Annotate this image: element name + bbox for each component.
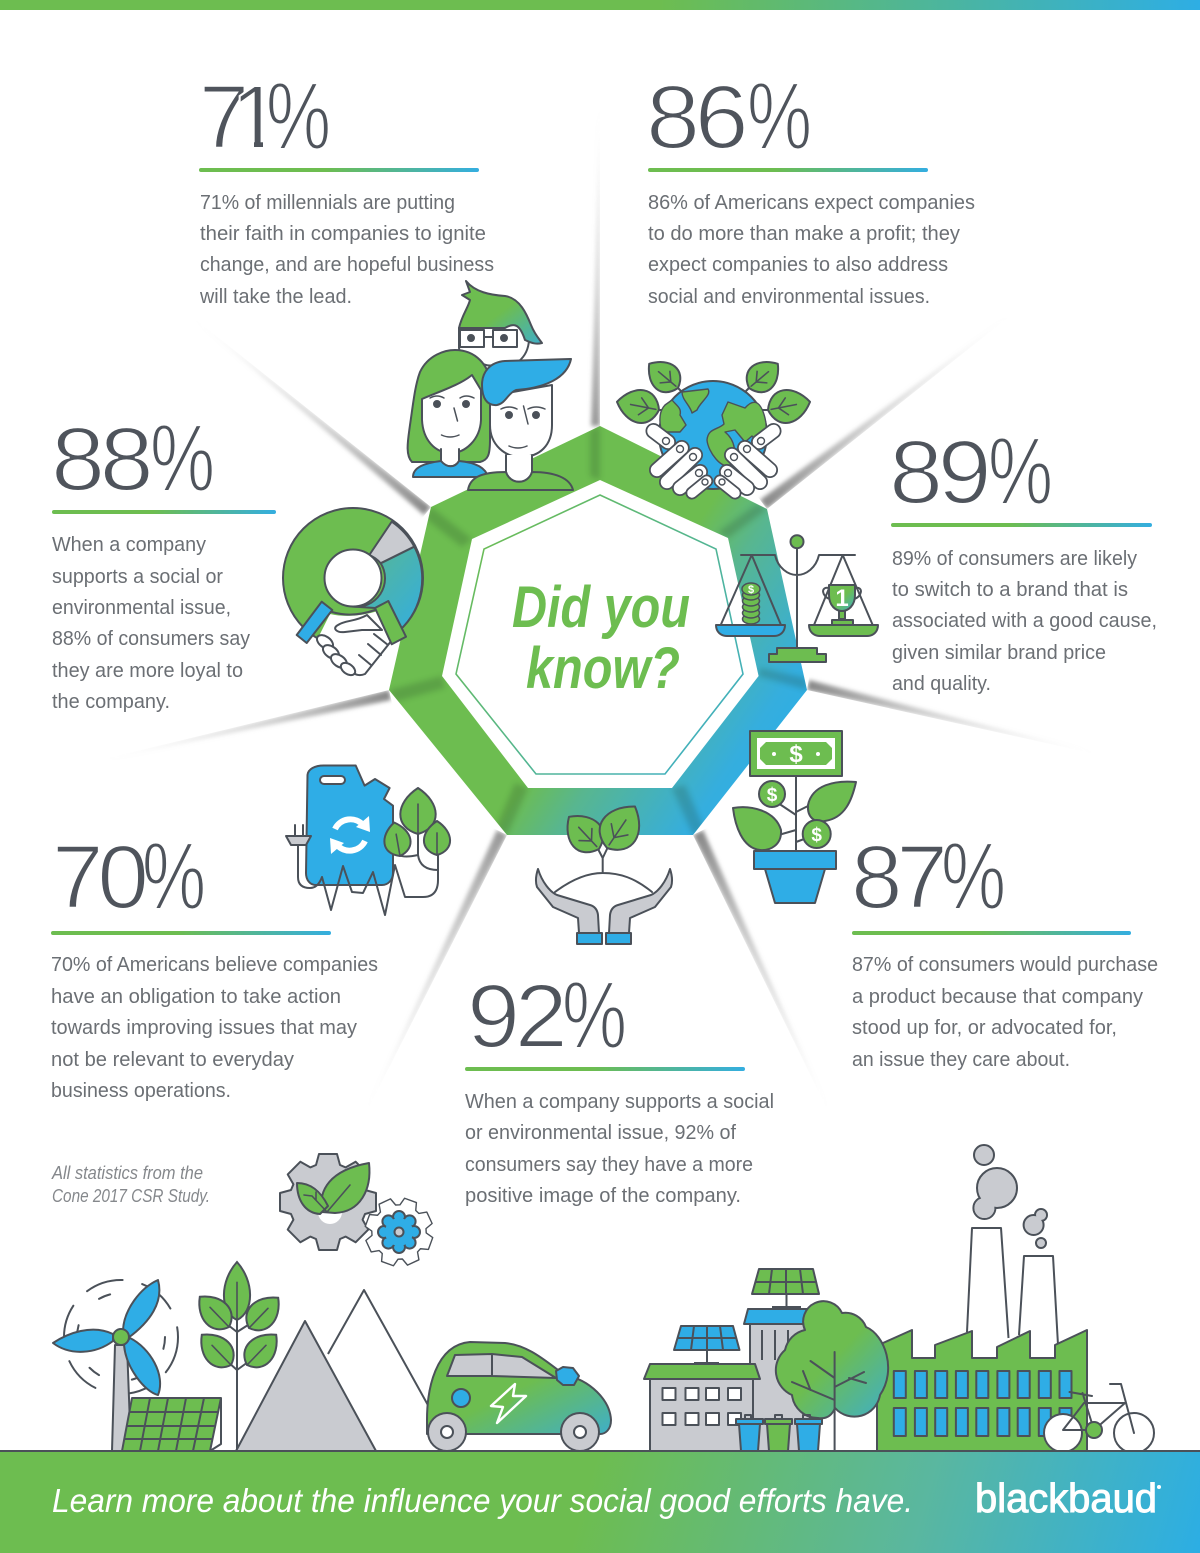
scene: low building with solar panel — [644, 1326, 760, 1451]
icon: gears with leaves — [280, 1154, 442, 1275]
stat: 70%: not be relevant to everyday — [51, 1049, 294, 1071]
heading: Did you know?: know? — [526, 636, 680, 701]
stat: 70%: 70% of Americans believe companies — [51, 954, 378, 976]
stat: 92%: consumers say they have a more — [465, 1154, 753, 1176]
stat: 70%: business operations. — [51, 1080, 231, 1102]
scene: bicycle — [1044, 1384, 1154, 1453]
scene: ground solar panel — [122, 1398, 221, 1451]
scene: tall building with solar panel — [744, 1269, 819, 1451]
band corner creases — [389, 426, 807, 835]
stat: 87%: 87% of consumers would purchase — [852, 954, 1158, 976]
stat: 87%: stood up for, or advocated for, — [852, 1017, 1117, 1039]
stat: 87%: % — [941, 823, 1006, 930]
stat: 86%: social and environmental issues. — [648, 286, 930, 308]
stat: 89%: 89% of consumers are likely — [892, 548, 1137, 570]
stat: 88%: environmental issue, — [52, 597, 231, 619]
stat: 88%: supports a social or — [52, 566, 223, 588]
scene: tree — [776, 1301, 888, 1451]
stat: 88%: 88% of consumers say — [52, 628, 250, 650]
plug and wire — [298, 830, 438, 915]
scene: recycling bins — [736, 1415, 822, 1451]
factory windows — [894, 1371, 1072, 1436]
stat: 89%: to switch to a brand that is — [892, 579, 1128, 601]
stat: 70%: % — [142, 823, 206, 930]
central heptagon badge — [389, 426, 807, 835]
stat: 89%: 89 — [889, 421, 987, 522]
icon: money plant: $ — [767, 785, 778, 806]
recycle symbol — [335, 819, 365, 851]
stat: 87%: a product because that company — [852, 986, 1143, 1008]
stat: 86%: 86 — [646, 66, 744, 167]
stat: 89%: % — [988, 418, 1053, 525]
stat: 92%: When a company supports a social — [465, 1091, 774, 1113]
heading: Did you know? — [512, 575, 690, 701]
icon: balance scale — [716, 535, 878, 662]
trophy — [823, 588, 861, 599]
stat: 88%: the company. — [52, 691, 170, 713]
icon: handshake over donut chart — [283, 508, 423, 678]
thin inner heptagon line — [456, 495, 743, 774]
icon: three people — [408, 281, 573, 490]
stat: 87%: an issue they care about. — [852, 1049, 1070, 1071]
stat: 86%: expect companies to also address — [648, 254, 948, 276]
icon: earth in hands — [614, 353, 813, 493]
top gradient bar — [0, 0, 1200, 10]
stat: 71%: 1 — [231, 68, 277, 168]
stat: 71%: their faith in companies to ignite — [200, 223, 486, 245]
stat: 70% — [51, 823, 378, 1102]
icon: recycled fuel can with plug — [286, 766, 450, 915]
stat: 92%: positive image of the company. — [465, 1185, 741, 1207]
heading: Did you know?: Did you — [512, 575, 690, 640]
stat: 89% — [889, 418, 1157, 695]
stat: 92% — [465, 962, 774, 1207]
icon: balance scale: 1 — [835, 585, 849, 612]
scene: electric car — [427, 1342, 611, 1451]
icon: seedling in hands — [536, 796, 672, 944]
footer call to action: Learn more about the influence your social good efforts have. — [52, 1482, 913, 1519]
stat: 89%: given similar brand price — [892, 642, 1106, 664]
stat: 87%: 87 — [851, 827, 944, 928]
source note: Cone 2017 CSR Study. — [52, 1186, 210, 1206]
stat: 70%: 70 — [52, 827, 146, 928]
icon: money plant — [733, 731, 856, 903]
stat: 92%: 92 — [467, 965, 563, 1066]
stat: 89%: associated with a good cause, — [892, 610, 1157, 632]
stat: 89%: and quality. — [892, 673, 991, 695]
stat: 86%: % — [747, 63, 812, 170]
logo: blackbaud: blackbaud — [975, 1475, 1157, 1521]
stat: 87% — [851, 823, 1158, 1071]
icon: balance scale: $ — [748, 584, 754, 596]
stat: 92%: % — [562, 962, 627, 1069]
scene: leafy plant — [190, 1262, 288, 1451]
stat: 86% — [646, 63, 975, 308]
icon: money plant: $ — [811, 825, 822, 846]
scene: factory with chimneys and smoke — [877, 1145, 1087, 1451]
stat: 86%: 86% of Americans expect companies — [648, 192, 975, 214]
source note: All statistics from the — [51, 1163, 203, 1183]
footer band — [0, 1450, 1200, 1553]
scene: wind turbine — [53, 1280, 178, 1451]
source note — [51, 1163, 210, 1206]
stat: 71% — [199, 63, 494, 308]
stat: 70%: towards improving issues that may — [51, 1017, 357, 1039]
stat: 86%: to do more than make a profit; they — [648, 223, 960, 245]
stat: 88%: 88 — [51, 408, 150, 509]
stat: 71%: change, and are hopeful business — [200, 254, 494, 276]
scene: mountains — [236, 1290, 429, 1451]
stat: 88% — [51, 405, 276, 713]
stat: 88%: When a company — [52, 534, 206, 556]
coin stack — [742, 583, 760, 624]
icon: money plant: $ — [789, 741, 803, 768]
stat: 70%: have an obligation to take action — [51, 986, 341, 1008]
stat: 71%: 7 — [199, 68, 245, 168]
stat: 92%: or environmental issue, 92% of — [465, 1122, 736, 1144]
stat: 88%: % — [150, 405, 215, 512]
stat: 71%: 71% of millennials are putting — [200, 192, 455, 214]
radiating shadow dividers — [100, 100, 1100, 1115]
hands — [316, 611, 393, 675]
stat: 71%: will take the lead. — [199, 286, 352, 308]
hands — [654, 431, 774, 493]
heptagon outer band — [389, 426, 807, 835]
stat: 71%: % — [266, 63, 331, 170]
stat: 88%: they are more loyal to — [52, 660, 243, 682]
